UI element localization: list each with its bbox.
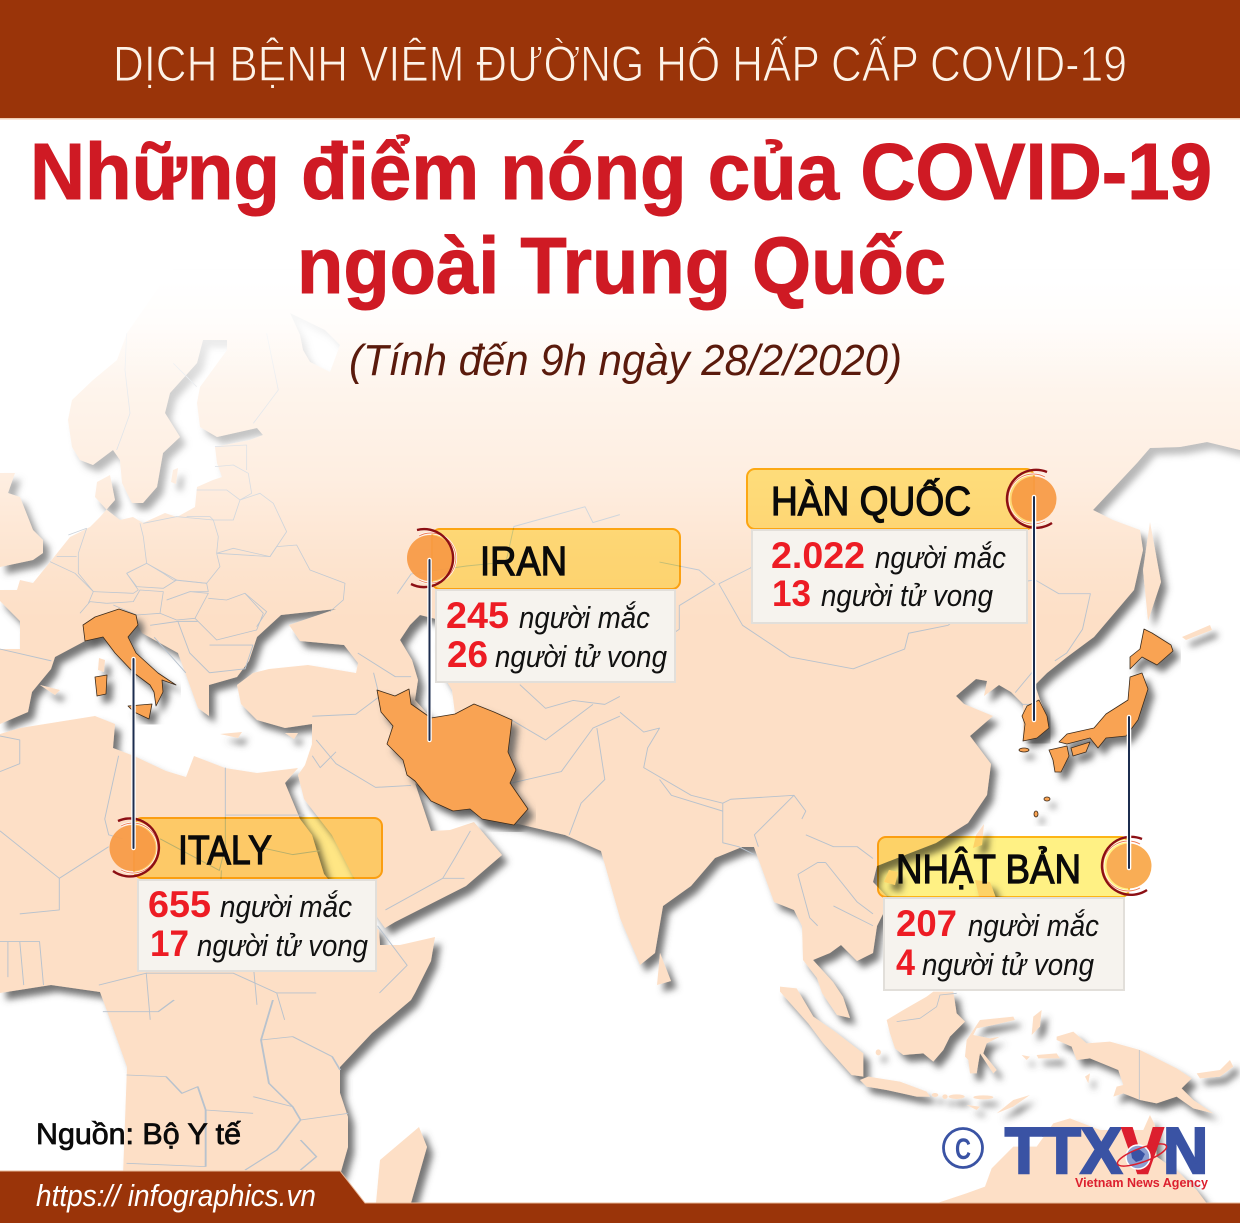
- callout: Iran: người mắc: [519, 600, 650, 635]
- callout: Iran: 245: [446, 595, 509, 636]
- title: Những điểm nóng của COVID-19: [30, 127, 1212, 216]
- footer url: https:// infographics.vn: [36, 1178, 316, 1213]
- logo tagline: Vietnam News Agency: [1075, 1175, 1209, 1190]
- callout: South Korea: 2.022: [771, 535, 865, 576]
- logo: TTXVN: [944, 1114, 1209, 1190]
- country borders: east: [620, 530, 1090, 926]
- callout: Japan: 4: [896, 942, 915, 983]
- logo wordmark: TTXVN: [1005, 1114, 1208, 1187]
- callout: Italy: ITALY: [178, 827, 272, 873]
- callout: Iran: IRAN: [480, 538, 567, 584]
- header bar: [0, 0, 1240, 120]
- callout: Italy: người tử vong: [197, 928, 368, 963]
- callout: Japan: người tử vong: [922, 947, 1094, 982]
- callout: South Korea: người mắc: [875, 540, 1006, 575]
- callout: Italy: 655: [148, 884, 211, 925]
- highlighted country: Italy: [83, 609, 176, 719]
- highlighted country: Japan: [1019, 629, 1173, 817]
- callout: South Korea: 13: [772, 573, 811, 614]
- callout: South Korea: HÀN QUỐC: [771, 478, 971, 524]
- marker: South Korea: [1007, 470, 1056, 720]
- country borders: Borneo and New Guinea: [897, 993, 1139, 1100]
- world map: [0, 270, 1240, 1203]
- callout: Japan: người mắc: [968, 908, 1099, 943]
- callout: Japan: NHẬT BẢN: [896, 846, 1081, 892]
- icon: copyright: C: [955, 1133, 971, 1166]
- icon: copyright: [944, 1128, 982, 1168]
- country borders: west: [0, 507, 620, 1020]
- country borders: southern Africa: [103, 1000, 348, 1170]
- callout: South Korea: người tử vong: [821, 578, 993, 613]
- marker: Japan: [1102, 717, 1152, 895]
- footer bar: [0, 1171, 1240, 1223]
- callout: Italy: người mắc: [220, 889, 352, 924]
- marker: Italy: [110, 659, 159, 876]
- source note: Nguồn: Bộ Y tế: [36, 1118, 241, 1151]
- land masses: [0, 270, 1240, 1203]
- white fade over the map: [0, 270, 1240, 640]
- highlighted country: Iran: [377, 689, 528, 825]
- callout: Iran: 26: [447, 634, 488, 675]
- callout: South Korea: [747, 469, 1034, 623]
- marker: Iran: [407, 529, 456, 740]
- country borders: northern Europe: [50, 333, 345, 640]
- callout: Iran: người tử vong: [495, 639, 667, 674]
- title: ngoài Trung Quốc: [297, 221, 946, 310]
- subtitle: date: (Tính đến 9h ngày 28/2/2020): [349, 336, 902, 385]
- highlighted country: South Korea: [1022, 700, 1049, 741]
- callout: Iran: [432, 529, 680, 682]
- callout: Italy: 17: [150, 923, 189, 964]
- icon: globe: [1115, 1140, 1169, 1170]
- callout: Japan: 207: [896, 903, 957, 944]
- callout: Japan: [878, 837, 1129, 990]
- title: [30, 127, 1212, 310]
- callout: Italy: [134, 818, 382, 971]
